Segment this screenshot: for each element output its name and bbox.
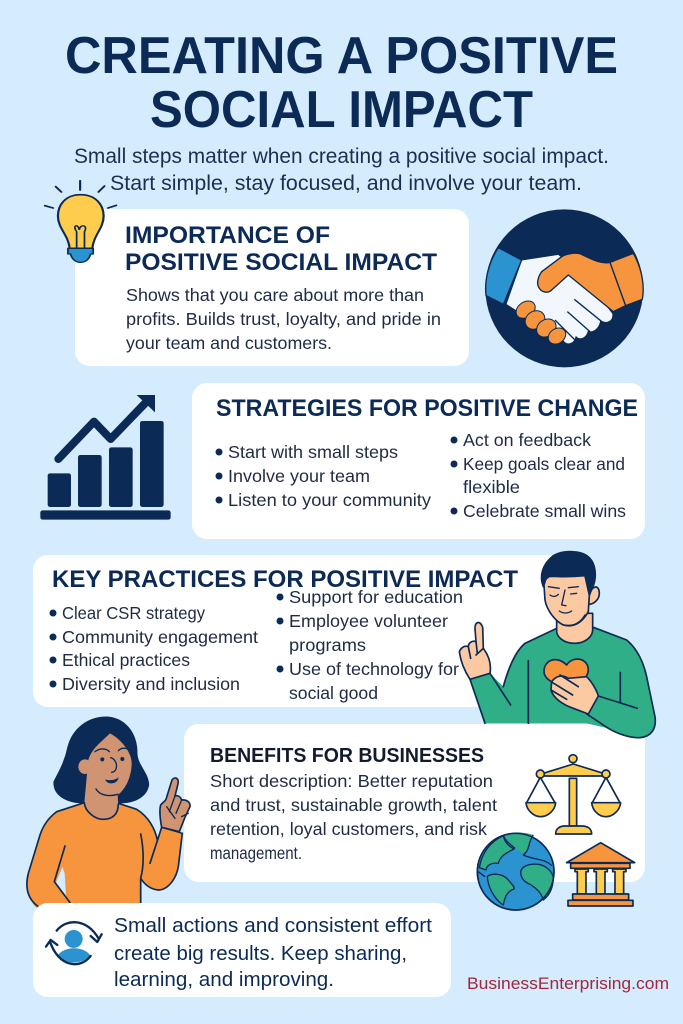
list: strategies left bbox=[216, 442, 431, 510]
list: practices right: Use of technology for bbox=[289, 659, 459, 679]
text: benefits body: Short description: Better reputation bbox=[210, 771, 493, 791]
list: practices right: Employee volunteer bbox=[289, 611, 448, 631]
text: importance body bbox=[126, 285, 441, 353]
list: strategies right: Act on feedback bbox=[463, 430, 591, 450]
panel: closing message bbox=[33, 903, 451, 997]
heading: strategies: STRATEGIES FOR POSITIVE CHANGE bbox=[216, 395, 638, 422]
orange hand bbox=[538, 253, 626, 312]
text: importance body: Shows that you care about more than bbox=[126, 285, 424, 305]
subtitle: Small steps matter when creating a positive social impact. bbox=[74, 145, 609, 168]
text: benefits body: and trust, sustainable growth, talent bbox=[210, 795, 497, 815]
icon: growth chart bbox=[40, 395, 171, 520]
panel: benefits bbox=[184, 724, 645, 882]
list: practices left bbox=[50, 603, 258, 694]
text: closing message bbox=[114, 915, 432, 991]
text: benefits body: retention, loyal customers, and risk bbox=[210, 819, 487, 839]
text: closing message: Small actions and consistent effort bbox=[114, 915, 432, 937]
list: strategies right bbox=[450, 430, 626, 521]
list: practices right: social good bbox=[289, 683, 378, 703]
text: closing message: learning, and improving. bbox=[114, 969, 334, 991]
list: practices right bbox=[276, 587, 463, 703]
panel: key practices bbox=[33, 555, 563, 707]
list: practices left: Ethical practices bbox=[62, 650, 190, 670]
icon: balance scale bbox=[526, 755, 621, 834]
title bbox=[65, 27, 618, 139]
icon: light bulb bbox=[45, 181, 116, 262]
panel: strategies bbox=[192, 383, 645, 539]
list: strategies left: Start with small steps bbox=[228, 442, 398, 462]
subtitle: Start simple, stay focused, and involve your team. bbox=[110, 172, 582, 195]
text: importance body: profits. Builds trust, loyalty, and pride in bbox=[126, 309, 441, 329]
text: importance body: your team and customers. bbox=[126, 333, 332, 353]
icon: person with cycle arrows bbox=[46, 922, 102, 964]
text: benefits body bbox=[210, 771, 497, 863]
list: practices left: Diversity and inclusion bbox=[62, 674, 240, 694]
heading: benefits: BENEFITS FOR BUSINESSES bbox=[210, 745, 484, 767]
text: benefits body: management. bbox=[210, 843, 302, 863]
heading: key practices: KEY PRACTICES FOR POSITIVE IMPACT bbox=[52, 566, 518, 593]
illustration: man with heart bbox=[459, 552, 655, 738]
list: practices right: Support for education bbox=[289, 587, 463, 607]
list: practices left: Community engagement bbox=[62, 627, 258, 647]
text: closing message: create big results. Keep sharing, bbox=[114, 943, 407, 965]
list: practices right: programs bbox=[289, 635, 366, 655]
list: practices left: Clear CSR strategy bbox=[62, 603, 205, 623]
list: strategies right: Celebrate small wins bbox=[463, 501, 626, 521]
title: SOCIAL IMPACT bbox=[150, 81, 533, 139]
list: strategies right: Keep goals clear and bbox=[463, 454, 625, 474]
illustration: scales and bank bbox=[526, 755, 635, 906]
illustration: woman pointing bbox=[27, 717, 190, 910]
icon: globe bbox=[477, 832, 554, 910]
blue cuff bbox=[486, 248, 522, 304]
orange fingers bbox=[513, 297, 569, 347]
icon: handshake bbox=[485, 209, 643, 367]
list: strategies left: Listen to your community bbox=[228, 490, 431, 510]
icon: bank building bbox=[567, 843, 635, 906]
white hand bbox=[506, 254, 613, 344]
heading: importance bbox=[125, 222, 437, 276]
subtitle bbox=[74, 145, 609, 195]
footer: website: BusinessEnterprising.com bbox=[467, 975, 669, 993]
man head bbox=[542, 552, 599, 643]
panel: importance bbox=[75, 209, 469, 366]
list: strategies right: flexible bbox=[463, 477, 520, 497]
title: CREATING A POSITIVE bbox=[65, 27, 618, 85]
heading: importance: IMPORTANCE OF bbox=[125, 222, 330, 249]
heading: importance: POSITIVE SOCIAL IMPACT bbox=[125, 249, 437, 276]
list: strategies left: Involve your team bbox=[228, 466, 370, 486]
orange cuff bbox=[610, 253, 643, 306]
